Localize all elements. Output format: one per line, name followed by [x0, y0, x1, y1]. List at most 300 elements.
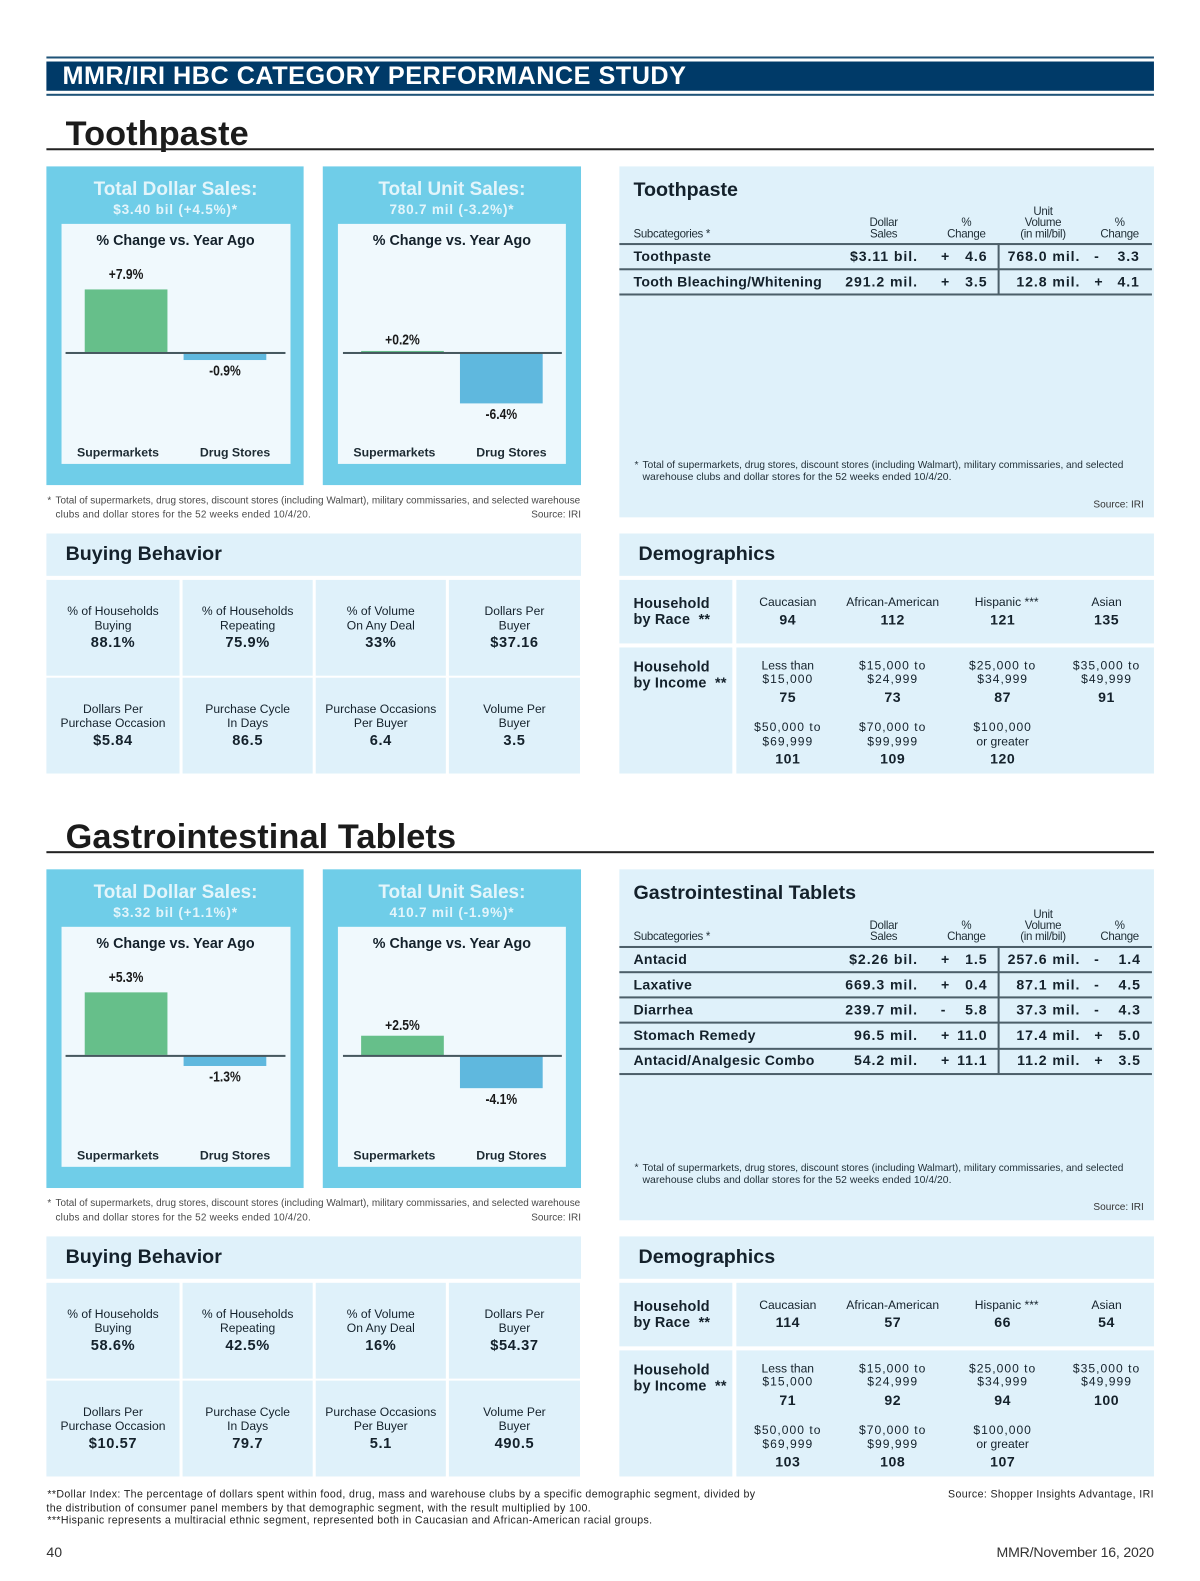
row: income index values: $25,000 to: [969, 1361, 1036, 1376]
chart title: % Change vs. Year Ago: [373, 233, 531, 249]
table rows: 87.1 mil.: [1016, 976, 1080, 992]
row: income index values: 87: [994, 689, 1011, 705]
metric: dollars per buyer: $37.16: [490, 635, 539, 651]
metric: dollars per buyer: $54.37: [490, 1338, 539, 1354]
row: income index values: 92: [884, 1392, 901, 1408]
footnote: panels: [47, 495, 581, 520]
table column headers: [633, 206, 1139, 240]
row: income index values: $69,999: [762, 734, 813, 748]
metric: purchase cycle: In Days: [227, 716, 268, 730]
row label: household by income: Household: [633, 1362, 710, 1378]
heading text: Demographics: [639, 543, 775, 565]
table footnote: [634, 460, 1123, 482]
metric: purchase cycle: In Days: [227, 1418, 268, 1433]
panel: subcategory table: [619, 166, 1154, 517]
footnote: panels: Total of supermarkets, drug stores, discount stores (including Walmart), military commissaries, and selected warehouse: [55, 1198, 580, 1209]
row: race index values: 114: [776, 1314, 800, 1330]
table rows: 0.4: [965, 976, 988, 992]
value: drug stores: -4.1%: [486, 1091, 517, 1108]
metric: volume on deal: [316, 580, 446, 676]
metric: purchase occasions: Per Buyer: [354, 716, 408, 730]
row: income index values: $25,000 to: [969, 659, 1036, 673]
table rows: -: [941, 1001, 945, 1017]
panel: total dollar sales: [46, 166, 304, 485]
panel value: $3.32 bil (+1.1%)*: [113, 905, 238, 920]
metric: dollars per occasion: [46, 1381, 180, 1476]
metric: dollars per occasion: Dollars Per: [83, 1405, 143, 1419]
metric: dollars per buyer: [449, 580, 580, 676]
chart title: % Change vs. Year Ago: [373, 936, 531, 952]
panel value: 410.7 mil (-1.9%)*: [389, 905, 514, 920]
table column headers: Volume: [1025, 920, 1061, 932]
table rows: +: [941, 1052, 949, 1068]
table rows: 11.0: [957, 1027, 988, 1043]
table column headers: Volume: [1025, 217, 1061, 229]
source: shopper insights: Source: Shopper Insights Advantage, IRI: [948, 1488, 1154, 1500]
table rows: 11.2 mil.: [1017, 1052, 1080, 1068]
table rows: 1.4: [1118, 951, 1141, 967]
row: income index values: 101: [775, 750, 800, 766]
metric: volume on deal: On Any Deal: [347, 1321, 415, 1335]
panel: buying behavior heading: [46, 533, 581, 576]
footnote: panels: [47, 1198, 581, 1223]
table source: Source: IRI: [1093, 499, 1144, 510]
row: income index values: $70,000 to: [859, 720, 926, 734]
table rows: 1.5: [965, 951, 988, 967]
bar: supermarkets: [85, 289, 167, 352]
row: race index values: Asian: [1091, 1298, 1122, 1312]
table rows: 4.1: [1117, 273, 1140, 289]
row: income index values: $24,999: [867, 1375, 918, 1389]
heading: Toothpaste: Toothpaste: [66, 115, 249, 153]
row: income index values: 71: [779, 1392, 796, 1408]
axis label: supermarkets: Supermarkets: [353, 1149, 435, 1163]
row: income index values: 107: [990, 1453, 1015, 1469]
row: income index values: 109: [880, 750, 905, 766]
row: race index values: 66: [994, 1314, 1011, 1330]
table column headers: Subcategories *: [633, 228, 710, 240]
table footnote: warehouse clubs and dollar stores for the 52 weeks ended 10/4/20.: [643, 471, 951, 482]
table rows: Antacid: [633, 951, 687, 967]
row label: household by race: [619, 1283, 732, 1346]
table column headers: Unit: [1033, 909, 1053, 921]
row: income index values: 103: [775, 1453, 800, 1469]
row: income index values: 120: [990, 750, 1015, 766]
metric: dollars per occasion: Purchase Occasion: [60, 1418, 165, 1433]
table rows: Diarrhea: [633, 1001, 693, 1017]
metric: volume per buyer: Volume Per: [483, 1405, 546, 1419]
table rows: $3.11 bil.: [850, 248, 918, 264]
table column headers: Unit: [1033, 206, 1053, 218]
panel: demographics heading: [619, 533, 1154, 576]
axis label: drug stores: Drug Stores: [476, 1149, 547, 1163]
row: income index values: $50,000 to: [754, 1423, 821, 1437]
table rows: +: [1094, 1052, 1103, 1068]
row: income index values: Less than: [762, 1361, 814, 1376]
table rows: +: [941, 951, 949, 967]
panel: subcategory table: [619, 869, 1154, 1220]
row: income index values: $24,999: [867, 672, 918, 686]
footnote: panels: Total of supermarkets, drug stores, discount stores (including Walmart), military commissaries, and selected warehouse: [55, 495, 580, 506]
table column headers: (in mil/bil): [1020, 228, 1066, 240]
row: income index values: $34,999: [977, 672, 1028, 686]
footnote: panels: *: [47, 495, 51, 506]
row: race index values: 121: [990, 611, 1015, 627]
metric: households repeating: 42.5%: [225, 1338, 270, 1354]
metric: households buying: % of Households: [67, 604, 159, 618]
footnote: panels: Source: IRI: [531, 509, 581, 520]
panel: total dollar sales: [46, 869, 304, 1188]
metric: households buying: Buying: [94, 618, 131, 632]
table rows: $2.26 bil.: [849, 951, 918, 967]
table rows: -: [1094, 976, 1099, 992]
row: income index values: $35,000 to: [1073, 1361, 1140, 1376]
metric: volume per buyer: Volume Per: [483, 702, 546, 716]
row: income index values: or greater: [976, 1437, 1029, 1451]
table column headers: Change: [1100, 228, 1139, 240]
panel: total unit sales: [323, 869, 581, 1188]
table rows: Toothpaste: [633, 248, 711, 264]
table column headers: Change: [947, 931, 986, 943]
metric: purchase occasions: 6.4: [370, 733, 392, 749]
table rows: Tooth Bleaching/Whitening: [633, 273, 822, 289]
metric: dollars per buyer: Dollars Per: [484, 604, 544, 618]
table rows: 37.3 mil.: [1016, 1001, 1080, 1017]
metric: households repeating: % of Households: [202, 1307, 293, 1321]
table rows: -: [1094, 1001, 1099, 1017]
value: supermarkets: +7.9%: [109, 266, 143, 283]
panel heading: Total Unit Sales:: [378, 178, 525, 199]
row: income index values: 73: [884, 689, 901, 705]
row: income index values: or greater: [976, 734, 1029, 748]
row: race index values: [736, 1283, 1154, 1346]
table rows: 12.8 mil.: [1016, 273, 1080, 289]
row label: household by race: [619, 580, 732, 643]
metric: purchase cycle: 86.5: [232, 733, 263, 749]
row label: household by income: [619, 647, 732, 774]
panel: demographics heading: [619, 1236, 1154, 1279]
metric: volume per buyer: [449, 678, 580, 774]
bar chart: unit sales change: [338, 927, 566, 1167]
row: race index values: African-American: [846, 1298, 939, 1312]
axis label: supermarkets: Supermarkets: [353, 446, 435, 460]
row: income index values: $99,999: [867, 1437, 918, 1451]
table rows: 4.3: [1118, 1001, 1141, 1017]
value: drug stores: -6.4%: [486, 406, 517, 423]
footnotes: dollar index and Hispanic definitions: the distribution of consumer panel members by that demographic segment, with the result multiplied by 100.: [46, 1502, 591, 1514]
metric: dollars per occasion: $10.57: [89, 1436, 137, 1452]
row label: household by race: Household: [633, 596, 710, 612]
table rows: 239.7 mil.: [845, 1001, 918, 1017]
row label: household by income: by Income **: [633, 1378, 727, 1395]
table rows: Laxative: [633, 976, 692, 992]
metric: volume on deal: 33%: [365, 635, 396, 651]
metric: dollars per buyer: Buyer: [499, 1321, 530, 1335]
heading text: Buying Behavior: [66, 1246, 222, 1268]
table rows: -: [1094, 951, 1099, 967]
row: income index values: $15,000: [762, 1375, 813, 1389]
row: income index values: $70,000 to: [859, 1423, 926, 1437]
bar: drug stores: [184, 353, 266, 360]
metric: volume per buyer: 490.5: [495, 1436, 534, 1452]
axis label: drug stores: Drug Stores: [476, 446, 547, 460]
bar: supermarkets: [85, 992, 167, 1055]
panel value: $3.40 bil (+4.5%)*: [113, 202, 238, 217]
table rows: 4.5: [1118, 976, 1141, 992]
page number: 40: [46, 1544, 62, 1560]
row: income index values: $49,999: [1081, 1375, 1132, 1389]
row: income index values: $35,000 to: [1073, 659, 1140, 673]
row label: household by income: [619, 1350, 732, 1476]
table rows: 96.5 mil.: [854, 1027, 918, 1043]
metric: volume per buyer: [449, 1381, 580, 1476]
metric: volume per buyer: Buyer: [499, 1418, 530, 1433]
row label: household by income: Household: [633, 659, 710, 676]
axis label: drug stores: Drug Stores: [200, 446, 270, 460]
publication date: MMR/November 16, 2020: [997, 1544, 1154, 1560]
axis label: supermarkets: Supermarkets: [77, 446, 159, 460]
footnote: panels: clubs and dollar stores for the 52 weeks ended 10/4/20.: [55, 1212, 311, 1223]
panel value: 780.7 mil (-3.2%)*: [389, 202, 514, 217]
metric: purchase cycle: [183, 678, 313, 774]
row: income index values: $15,000 to: [859, 1361, 926, 1376]
table rows: +: [1094, 273, 1103, 289]
value: drug stores: -1.3%: [209, 1069, 241, 1086]
metric: households buying: [46, 580, 180, 676]
row: income index values: [736, 1350, 1154, 1476]
table rows: 669.3 mil.: [845, 976, 918, 992]
axis label: supermarkets: Supermarkets: [77, 1149, 159, 1163]
row: income index values: $34,999: [977, 1375, 1028, 1389]
metric: purchase occasions: Per Buyer: [354, 1418, 408, 1433]
metric: households buying: Buying: [94, 1321, 131, 1335]
table footnote: *: [634, 460, 639, 471]
metric: purchase occasions: [316, 678, 446, 774]
table rows: -: [1094, 248, 1099, 264]
metric: households repeating: % of Households: [202, 604, 293, 618]
row: income index values: $69,999: [762, 1437, 813, 1451]
table rows: +: [941, 248, 949, 264]
table heading: Toothpaste: [633, 179, 738, 201]
metric: purchase occasions: Purchase Occasions: [325, 1405, 436, 1419]
table rows: +: [941, 1027, 949, 1043]
value: drug stores: -0.9%: [209, 363, 241, 380]
footnotes: dollar index and Hispanic definitions: **Dollar Index: The percentage of dollars spent within food, drug, mass and warehouse clubs by a specific demographic segment, divided by: [47, 1488, 755, 1500]
table footnote: warehouse clubs and dollar stores for the 52 weeks ended 10/4/20.: [643, 1174, 951, 1185]
metric: purchase cycle: 79.7: [232, 1436, 263, 1452]
chart title: % Change vs. Year Ago: [96, 936, 255, 952]
row: income index values: 100: [1094, 1392, 1119, 1408]
table rows: Antacid/Analgesic Combo: [633, 1052, 815, 1068]
table heading: Gastrointestinal Tablets: [633, 882, 856, 904]
banner title: MMR/IRI HBC CATEGORY PERFORMANCE STUDY: [63, 62, 686, 90]
row: income index values: 75: [779, 689, 796, 705]
table rows: 768.0 mil.: [1008, 248, 1080, 264]
row: race index values: Hispanic ***: [975, 1298, 1039, 1312]
row: race index values: [736, 580, 1154, 643]
bar chart: dollar sales change: [62, 224, 291, 464]
table column headers: %: [1115, 920, 1125, 932]
panel heading: Total Dollar Sales:: [94, 881, 257, 902]
row: income index values: Less than: [762, 659, 814, 673]
table column headers: %: [961, 920, 971, 932]
panel: total unit sales: [323, 166, 581, 485]
table rows: [619, 243, 1152, 296]
row: income index values: $15,000: [762, 672, 813, 686]
row: income index values: [736, 647, 1154, 774]
metric: volume on deal: On Any Deal: [347, 618, 415, 632]
heading text: Buying Behavior: [66, 543, 222, 565]
metric: purchase occasions: 5.1: [370, 1436, 392, 1452]
table rows: +: [941, 976, 949, 992]
table column headers: Change: [947, 228, 986, 240]
footnotes: dollar index and Hispanic definitions: ***Hispanic represents a multiracial ethnic segment, represented both in Caucasian and African-American racial groups.: [47, 1515, 653, 1527]
table column headers: %: [961, 217, 971, 229]
row: income index values: 94: [994, 1392, 1011, 1408]
table column headers: Dollar: [870, 217, 898, 229]
metric: volume on deal: % of Volume: [347, 604, 415, 618]
table rows: 3.5: [1118, 1052, 1141, 1068]
metric: households repeating: 75.9%: [225, 635, 270, 651]
bar chart: dollar sales change: [62, 927, 291, 1167]
table column headers: %: [1115, 217, 1125, 229]
heading: Gastrointestinal Tablets: Gastrointestinal Tablets: [66, 818, 456, 856]
heading text: Demographics: [639, 1246, 775, 1268]
row: race index values: Hispanic ***: [975, 595, 1039, 609]
table rows: 291.2 mil.: [845, 273, 918, 289]
metric: households buying: 58.6%: [91, 1338, 135, 1354]
row: race index values: Caucasian: [759, 595, 816, 609]
metric: dollars per buyer: Dollars Per: [484, 1307, 544, 1321]
table source: Source: IRI: [1093, 1202, 1144, 1213]
table rows: 3.5: [965, 273, 988, 289]
metric: dollars per occasion: Dollars Per: [83, 702, 143, 716]
table column headers: Change: [1100, 931, 1139, 943]
metric: households buying: 88.1%: [91, 635, 135, 651]
table rows: [619, 946, 1152, 1076]
table column headers: Sales: [870, 931, 897, 943]
footnote: panels: Source: IRI: [531, 1212, 581, 1223]
panel heading: Total Dollar Sales:: [94, 178, 257, 199]
row: race index values: 135: [1094, 611, 1119, 627]
metric: purchase occasions: [316, 1381, 446, 1476]
row: race index values: 94: [779, 611, 796, 627]
metric: households repeating: Repeating: [220, 618, 275, 632]
metric: dollars per buyer: Buyer: [499, 618, 530, 632]
row: income index values: 91: [1098, 689, 1115, 705]
row label: household by income: by Income **: [633, 676, 727, 692]
row: race index values: 54: [1098, 1314, 1115, 1330]
bar: drug stores: [460, 353, 543, 403]
header banner: [46, 56, 1154, 96]
table rows: 54.2 mil.: [854, 1052, 918, 1068]
metric: volume on deal: 16%: [365, 1338, 396, 1354]
table column headers: Subcategories *: [633, 931, 710, 943]
row: income index values: 108: [880, 1453, 905, 1469]
metric: purchase cycle: Purchase Cycle: [205, 702, 290, 716]
metric: dollars per buyer: [449, 1283, 580, 1379]
row: race index values: Caucasian: [759, 1298, 816, 1312]
section: Toothpaste: [46, 115, 1154, 774]
table rows: 11.1: [957, 1052, 988, 1068]
table footnote: Total of supermarkets, drug stores, discount stores (including Walmart), military commissaries, and selected: [643, 1163, 1123, 1174]
table rows: 257.6 mil.: [1008, 951, 1080, 967]
value: supermarkets: +2.5%: [385, 1017, 420, 1034]
row: income index values: $100,000: [973, 720, 1032, 734]
metric: volume on deal: [316, 1283, 446, 1379]
row label: household by race: Household: [633, 1299, 710, 1315]
bar chart: unit sales change: [338, 224, 566, 464]
table rows: 5.0: [1118, 1027, 1141, 1043]
row: income index values: $15,000 to: [859, 659, 926, 673]
table footnote: Total of supermarkets, drug stores, discount stores (including Walmart), military commissaries, and selected: [643, 460, 1123, 471]
table column headers: Sales: [870, 228, 897, 240]
metric: purchase occasions: Purchase Occasions: [325, 702, 436, 716]
metric: volume per buyer: Buyer: [499, 716, 530, 730]
metric: households buying: % of Households: [67, 1307, 159, 1321]
panel: buying behavior heading: [46, 1236, 581, 1279]
metric: purchase cycle: Purchase Cycle: [205, 1405, 290, 1419]
table column headers: (in mil/bil): [1020, 931, 1066, 943]
table rows: Stomach Remedy: [633, 1027, 756, 1043]
bar: drug stores: [460, 1056, 543, 1088]
axis label: drug stores: Drug Stores: [200, 1149, 270, 1163]
table footnote: *: [634, 1163, 639, 1174]
row: race index values: Asian: [1091, 595, 1122, 609]
footnote: panels: clubs and dollar stores for the 52 weeks ended 10/4/20.: [55, 509, 311, 520]
row: race index values: 112: [881, 611, 905, 627]
table footnote: [634, 1163, 1123, 1185]
value: supermarkets: +0.2%: [385, 331, 420, 348]
table rows: 3.3: [1117, 248, 1140, 264]
table rows: 5.8: [965, 1001, 988, 1017]
value: supermarkets: +5.3%: [109, 969, 143, 986]
bar: supermarkets: [361, 351, 444, 352]
metric: households repeating: [183, 580, 313, 676]
metric: volume on deal: % of Volume: [347, 1307, 415, 1321]
row label: household by race: by Race **: [633, 612, 710, 628]
bar: drug stores: [184, 1056, 266, 1066]
section: Gastrointestinal Tablets: [46, 818, 1154, 1476]
row: income index values: $49,999: [1081, 672, 1132, 686]
chart title: % Change vs. Year Ago: [96, 233, 255, 249]
metric: households buying: [46, 1283, 180, 1379]
table rows: 4.6: [965, 248, 988, 264]
row: race index values: 57: [884, 1314, 901, 1330]
metric: dollars per occasion: [46, 678, 180, 774]
panel heading: Total Unit Sales:: [378, 881, 525, 902]
row: income index values: $50,000 to: [754, 720, 821, 734]
metric: households repeating: Repeating: [220, 1321, 275, 1335]
table rows: +: [1094, 1027, 1103, 1043]
row: income index values: $99,999: [867, 734, 918, 748]
row: race index values: African-American: [846, 595, 939, 609]
table column headers: Dollar: [870, 920, 898, 932]
table rows: +: [941, 273, 949, 289]
row: income index values: $100,000: [973, 1423, 1032, 1437]
metric: dollars per occasion: $5.84: [93, 733, 133, 749]
metric: dollars per occasion: Purchase Occasion: [60, 716, 165, 730]
footnote: panels: *: [47, 1198, 51, 1209]
bar: supermarkets: [361, 1036, 444, 1056]
row label: household by race: by Race **: [633, 1315, 710, 1331]
table rows: 17.4 mil.: [1016, 1027, 1080, 1043]
metric: purchase cycle: [183, 1381, 313, 1476]
table column headers: [633, 909, 1139, 943]
footnotes: dollar index and Hispanic definitions: [46, 1488, 755, 1527]
metric: households repeating: [183, 1283, 313, 1379]
metric: volume per buyer: 3.5: [503, 733, 526, 749]
